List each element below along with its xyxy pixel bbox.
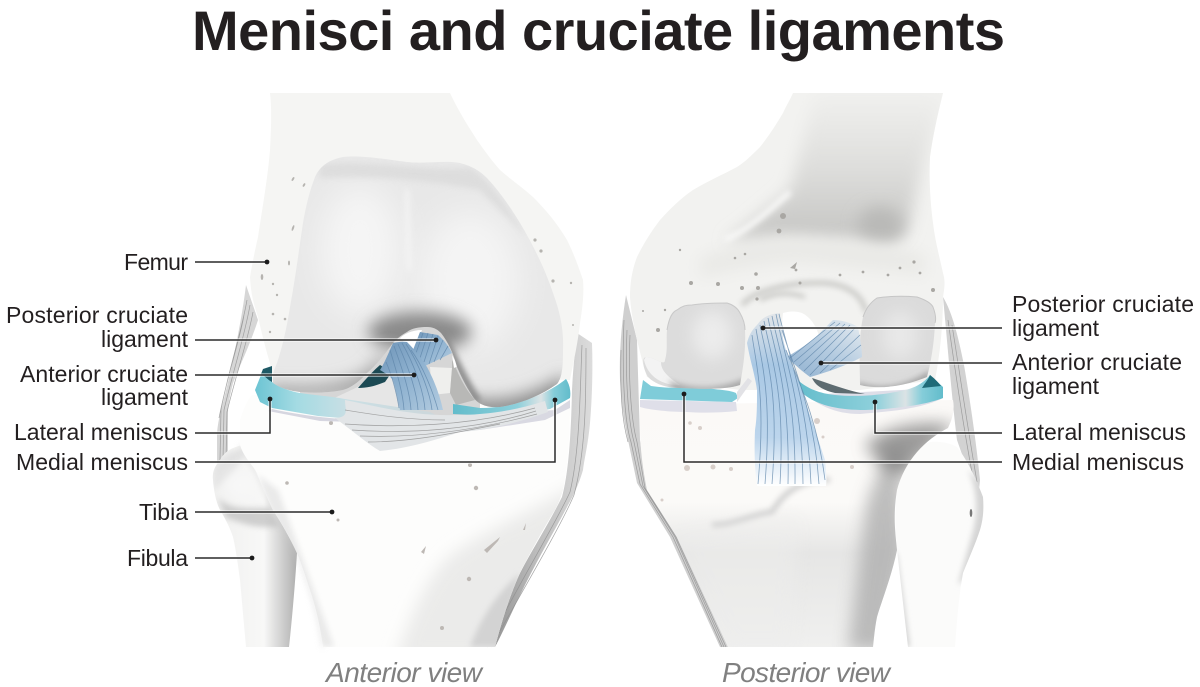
labels: anterior view: Fibula (127, 545, 188, 571)
labels: anterior view: Anterior cruciate (20, 361, 188, 387)
medial meniscus (453, 379, 570, 430)
lateral meniscus (255, 366, 445, 423)
lateral meniscus (793, 374, 943, 414)
bone: tibia (625, 395, 960, 650)
labels: posterior view: Lateral meniscus (1012, 419, 1186, 445)
bone: femur (630, 93, 945, 390)
posterior cruciate ligament (747, 313, 826, 486)
labels: posterior view: Medial meniscus (1012, 449, 1184, 475)
labels: anterior view: Lateral meniscus (14, 419, 188, 445)
leader lines (195, 260, 1002, 560)
posterior knee illustration (620, 93, 990, 650)
left collateral ligament (620, 295, 728, 647)
bone: femur (250, 93, 583, 380)
bone: tibia (240, 421, 563, 647)
medial collateral ligament (482, 333, 592, 647)
labels: posterior view: Anterior cruciate (1012, 349, 1182, 375)
labels: anterior view: ligament (101, 326, 189, 352)
labels: anterior view: Posterior cruciate (6, 302, 188, 328)
transverse ligament (335, 400, 548, 451)
anterior cruciate ligament (380, 342, 443, 410)
anterior cruciate ligament (787, 320, 862, 377)
bone: fibula (212, 446, 297, 647)
medial meniscus (640, 378, 752, 413)
labels: anterior view: ligament (101, 384, 189, 410)
anterior knee illustration (210, 93, 600, 660)
notch opening (782, 312, 819, 358)
labels: anterior view (6, 249, 189, 571)
title: Menisci and cruciate ligaments (192, 0, 1005, 62)
labels: posterior view: Posterior cruciate (1012, 291, 1194, 317)
labels: anterior view: Medial meniscus (16, 449, 188, 475)
posterior cruciate ligament (413, 332, 452, 366)
right collateral ligament (943, 297, 980, 500)
labels: posterior view: ligament (1012, 315, 1100, 341)
labels: posterior view (1012, 291, 1194, 475)
bone: fibula (898, 454, 984, 647)
left femoral condyle (643, 302, 746, 389)
right femoral condyle (860, 296, 936, 388)
lateral collateral ligament (217, 285, 258, 463)
labels: posterior view: ligament (1012, 373, 1100, 399)
labels: anterior view: Tibia (139, 499, 188, 525)
notch backing (300, 325, 480, 418)
femoral cartilage (272, 156, 563, 408)
labels: anterior view: Femur (124, 249, 188, 275)
